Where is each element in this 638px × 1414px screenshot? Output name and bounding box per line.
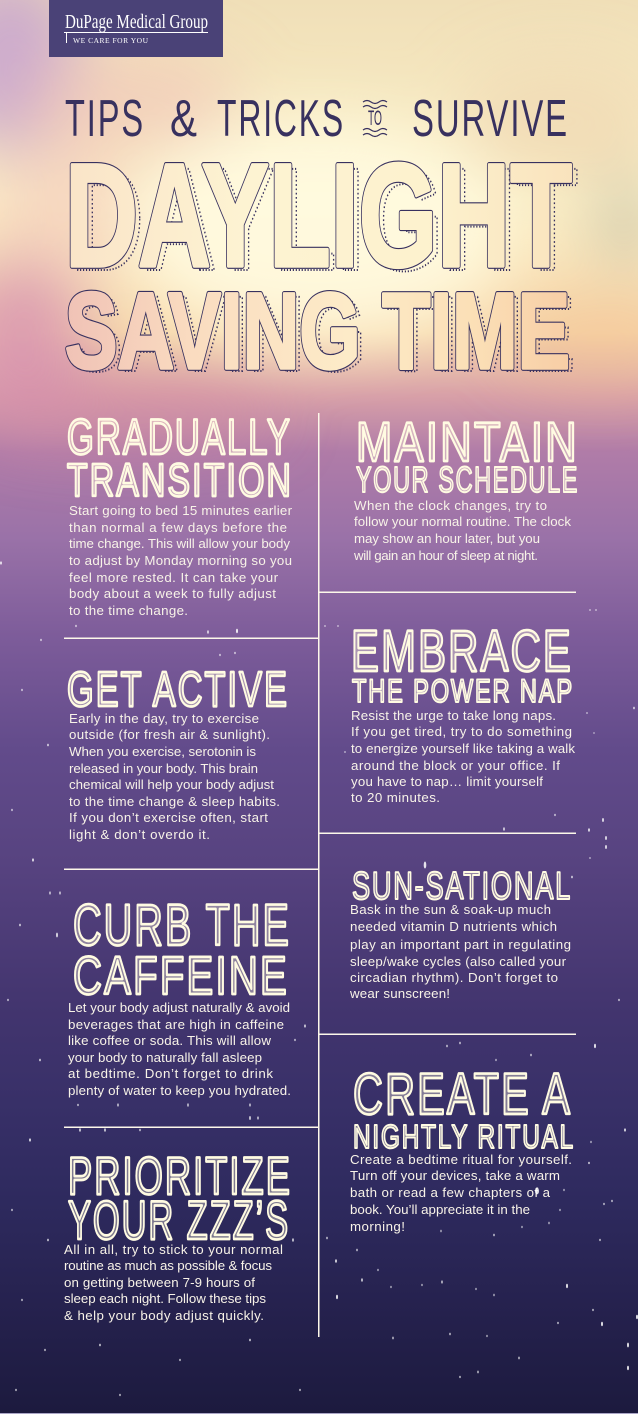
heading: gradually transition: TRANSITION — [67, 454, 293, 506]
body text — [349, 902, 571, 1001]
body text: routine as much as possible & focus — [64, 1258, 272, 1273]
heading: curb the caffeine — [73, 893, 291, 1006]
body text: Start going to bed 15 minutes earlier — [69, 503, 293, 518]
body text: If you don’t exercise often, start — [69, 810, 268, 825]
body text: beverages that are high in caffeine — [68, 1017, 284, 1032]
panel: create a nightly ritual — [350, 1062, 575, 1234]
body text: your body to naturally fall asleep — [68, 1050, 262, 1065]
body text: sleep/wake cycles (also called your — [350, 954, 567, 969]
body text: released in your body. This brain — [69, 761, 258, 776]
body text: When the clock changes, try to — [354, 498, 547, 513]
heading: embrace the power nap — [351, 619, 574, 709]
body text: If you get tired, try to do something — [351, 724, 572, 739]
body text — [69, 711, 280, 842]
body text: All in all, try to stick to your normal — [64, 1242, 283, 1257]
body text — [68, 1000, 291, 1098]
body text: at bedtime. Don’t forget to drink — [68, 1066, 273, 1081]
heading: prioritize your zzz's: YOUR ZZZ’S — [68, 1189, 290, 1251]
panel: maintain your schedule — [353, 410, 579, 563]
stars — [0, 561, 638, 1396]
dividers — [64, 413, 576, 1337]
title line: tips and tricks to survive — [65, 90, 569, 148]
heading: get active: GET ACTIVE — [67, 663, 289, 717]
logo box — [49, 0, 223, 57]
body text: around the block or your office. If — [351, 758, 560, 773]
panel: sun-sational — [349, 865, 572, 1001]
title line: tips and tricks to survive: TO — [368, 107, 382, 130]
body text: & help your body adjust quickly. — [64, 1308, 264, 1323]
title line: tips and tricks to survive: & — [170, 90, 197, 148]
logo box: DuPage Medical Group — [65, 11, 208, 33]
body text: may show an hour later, but you — [354, 531, 540, 546]
body text: like coffee or soda. This will allow — [68, 1033, 271, 1048]
body text — [353, 498, 571, 563]
body text: feel more rested. It can take your — [69, 570, 279, 585]
title line: tips and tricks to survive: TRICKS — [217, 90, 345, 148]
body text: than normal a few days before the — [69, 520, 287, 535]
body text: When you exercise, serotonin is — [69, 744, 256, 759]
body text: will gain an hour of sleep at night. — [353, 548, 538, 563]
body text: Let your body adjust naturally & avoid — [68, 1000, 290, 1015]
heading: curb the caffeine: CURB THE — [73, 893, 291, 958]
body text: Early in the day, try to exercise — [69, 711, 259, 726]
body text: Create a bedtime ritual for yourself. — [350, 1152, 572, 1167]
logo box: WE CARE FOR YOU — [73, 36, 149, 45]
body text: book. You’ll appreciate it in the — [350, 1202, 530, 1217]
heading: prioritize your zzz's: PRIORITIZE — [68, 1147, 292, 1206]
body text: needed vitamin D nutrients which — [350, 919, 557, 934]
panel: get active — [67, 663, 289, 842]
heading: prioritize your zzz's — [68, 1147, 292, 1251]
body text: to the time change. — [69, 603, 188, 618]
body text: body about a week to fully adjust — [69, 586, 276, 601]
heading: gradually transition — [67, 409, 293, 506]
panel: gradually transition — [67, 409, 293, 618]
body text: you have to nap… limit yourself — [351, 774, 543, 789]
body text: play an important part in regulating — [350, 937, 571, 952]
panel: curb the caffeine — [68, 893, 291, 1098]
body text: Resist the urge to take long naps. — [351, 708, 556, 723]
body text — [64, 1242, 283, 1323]
heading: maintain your schedule: MAINTAIN — [356, 410, 579, 473]
body text: wear sunscreen! — [349, 986, 450, 1001]
body text: Turn off your devices, take a warm — [350, 1168, 560, 1183]
body text: to 20 minutes. — [351, 790, 440, 805]
body text: Bask in the sun & soak-up much — [350, 902, 551, 917]
heading: curb the caffeine: CAFFEINE — [73, 946, 289, 1006]
body text: on getting between 7-9 hours of — [64, 1275, 255, 1290]
body text: sleep each night. Follow these tips — [64, 1291, 266, 1306]
panel: prioritize your zzz's — [64, 1147, 292, 1323]
body text: follow your normal routine. The clock — [354, 514, 571, 529]
body text: to adjust by Monday morning so you — [69, 553, 292, 568]
body text: plenty of water to keep you hydrated. — [68, 1083, 291, 1098]
body text — [351, 708, 575, 805]
body text: to the time change & sleep habits. — [69, 794, 280, 809]
title — [65, 90, 578, 394]
body text: light & don’t overdo it. — [69, 827, 210, 842]
body text: time change. This will allow your body — [69, 536, 290, 551]
heading: gradually transition: GRADUALLY — [67, 409, 292, 465]
body text: outside (for fresh air & sunlight). — [69, 727, 270, 742]
body text — [69, 503, 293, 618]
panel: embrace the power nap — [351, 619, 575, 805]
body text — [350, 1152, 572, 1234]
body text: chemical will help your body adjust — [69, 777, 274, 792]
heading: maintain your schedule — [356, 410, 579, 500]
title line: tips and tricks to survive: TIPS — [65, 90, 145, 148]
body text: morning! — [350, 1219, 405, 1234]
body text: circadian rhythm). Don’t forget to — [350, 970, 558, 985]
body text: bath or read a few chapters of a — [350, 1185, 551, 1200]
heading: create a nightly ritual — [353, 1062, 575, 1155]
body text: to energize yourself like taking a walk — [351, 741, 575, 756]
